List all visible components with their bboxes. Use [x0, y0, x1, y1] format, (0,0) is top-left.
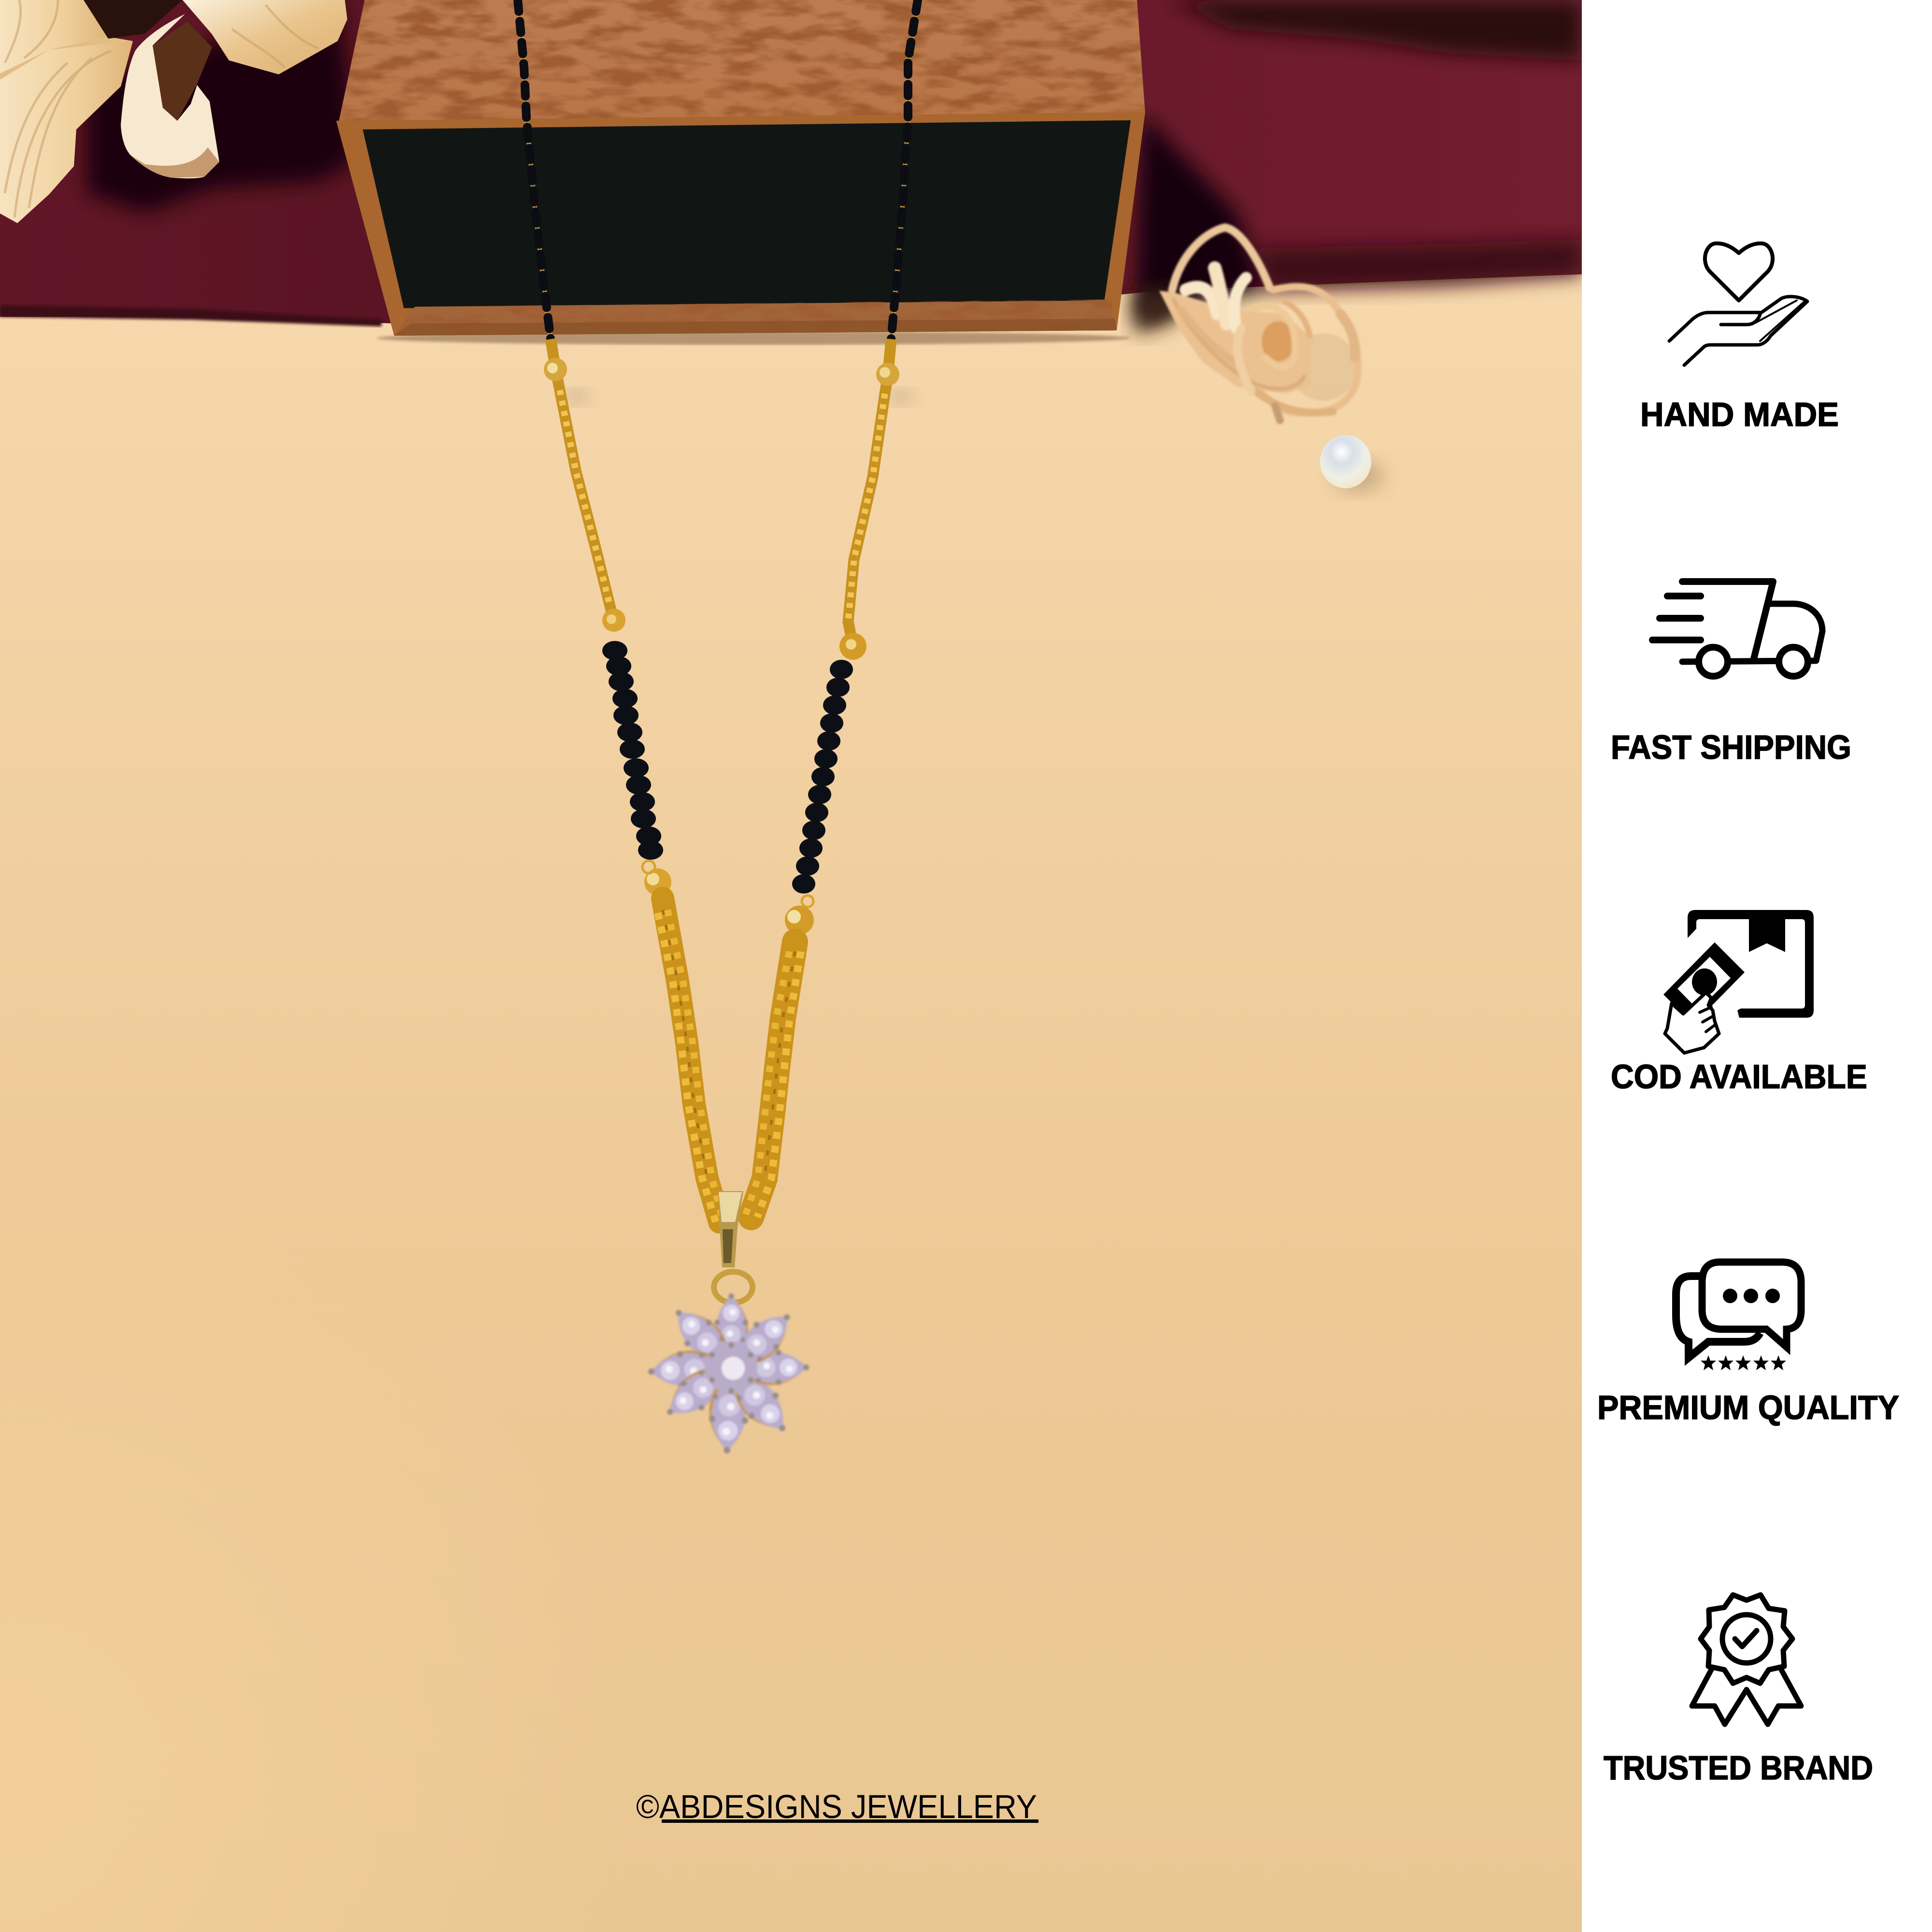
icon: parcel and cash in hand [1663, 910, 1814, 1053]
box frame [336, 112, 1145, 336]
lower twin gold chain, left [658, 898, 724, 1222]
label: hand made: HAND MADE [1640, 396, 1839, 433]
pendant bail and jump ring [714, 1191, 753, 1303]
gift box [336, 0, 1150, 345]
dried flower petals [0, 0, 347, 223]
icon: award rosette with check [1692, 1595, 1801, 1724]
floor surface [0, 242, 1582, 1932]
ribbon curl [1159, 227, 1358, 420]
necklace [518, 0, 918, 1454]
feature: trusted brand [1604, 1595, 1873, 1787]
burgundy fabric backdrop [0, 0, 1582, 333]
box front lip [391, 297, 1121, 338]
label: premium quality: PREMIUM QUALITY [1597, 1389, 1899, 1426]
copyright line: ©ABDESIGNS JEWELLERY [636, 1788, 1037, 1825]
label: fast shipping: FAST SHIPPING [1611, 728, 1851, 766]
black beads, right strand [792, 660, 853, 894]
flower pendant [647, 1293, 809, 1454]
pearl [1320, 435, 1383, 491]
necklace shadows [568, 390, 910, 404]
upper black bead chain, right [891, 0, 918, 339]
panel: white sidebar background [1582, 0, 1932, 1932]
feature: hand made [1640, 243, 1839, 433]
icon: delivery truck [1652, 582, 1822, 676]
feature: premium quality [1597, 1262, 1899, 1426]
gold box chain, right [848, 339, 891, 646]
black beads, left strand [602, 641, 663, 860]
icon: chat bubbles with stars [1676, 1262, 1801, 1370]
feature: fast shipping [1611, 582, 1851, 766]
label: trusted brand: TRUSTED BRAND [1604, 1749, 1873, 1787]
lower twin gold chain, right [745, 942, 801, 1217]
box dark interior [363, 120, 1131, 308]
gold box chain, left [551, 339, 614, 623]
gold balls [544, 358, 899, 935]
upper black bead chain, left [518, 0, 551, 339]
box lid top face [338, 0, 1150, 126]
icon: heart in hand [1669, 243, 1807, 365]
feature: cod available [1611, 910, 1867, 1095]
label: cod available: COD AVAILABLE [1611, 1058, 1867, 1095]
